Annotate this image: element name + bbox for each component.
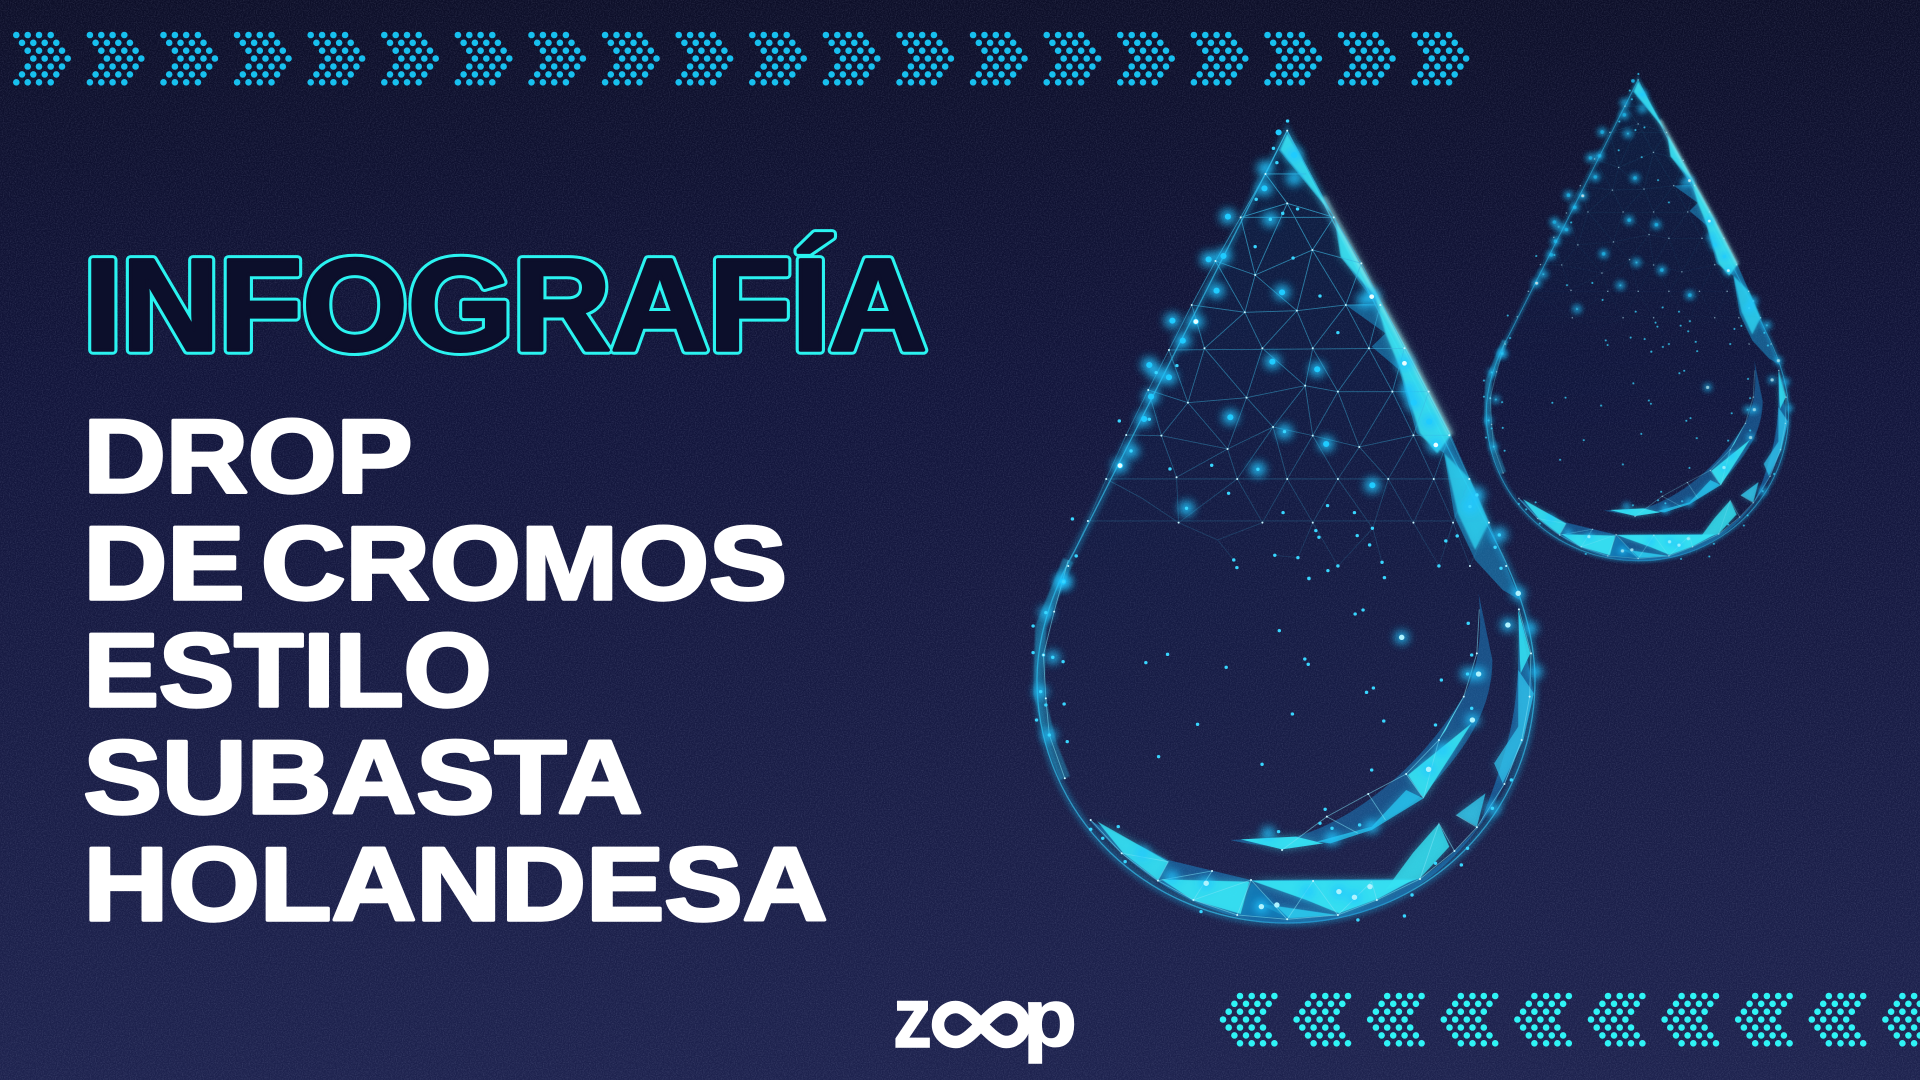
small water drop <box>1484 74 1789 561</box>
title: drop de cromos estilo subasta holandesa: HOLANDESA <box>84 827 828 943</box>
title: drop de cromos estilo subasta holandesa: SUBASTA <box>84 720 642 836</box>
logo: zoop: z <box>893 970 932 1066</box>
logo: zoop: p <box>1023 973 1077 1064</box>
title: drop de cromos estilo subasta holandesa: DROP <box>84 399 412 515</box>
title: drop de cromos estilo subasta holandesa: DE <box>84 506 244 622</box>
title: drop de cromos estilo subasta holandesa: ESTILO <box>84 613 492 729</box>
big water drop <box>1033 121 1535 923</box>
bottom chevron row <box>1223 996 1920 1043</box>
title: drop de cromos estilo subasta holandesa: CROMOS <box>261 506 787 622</box>
heading: INFOGRAFÍA outlined: INFOGRAFÍA <box>84 231 927 378</box>
logo: zoop <box>893 970 1077 1066</box>
heading: INFOGRAFÍA outlined: INFOGRAFÍA <box>84 231 927 378</box>
top chevron row <box>16 35 1466 82</box>
title: drop de cromos estilo subasta holandesa <box>84 399 828 943</box>
